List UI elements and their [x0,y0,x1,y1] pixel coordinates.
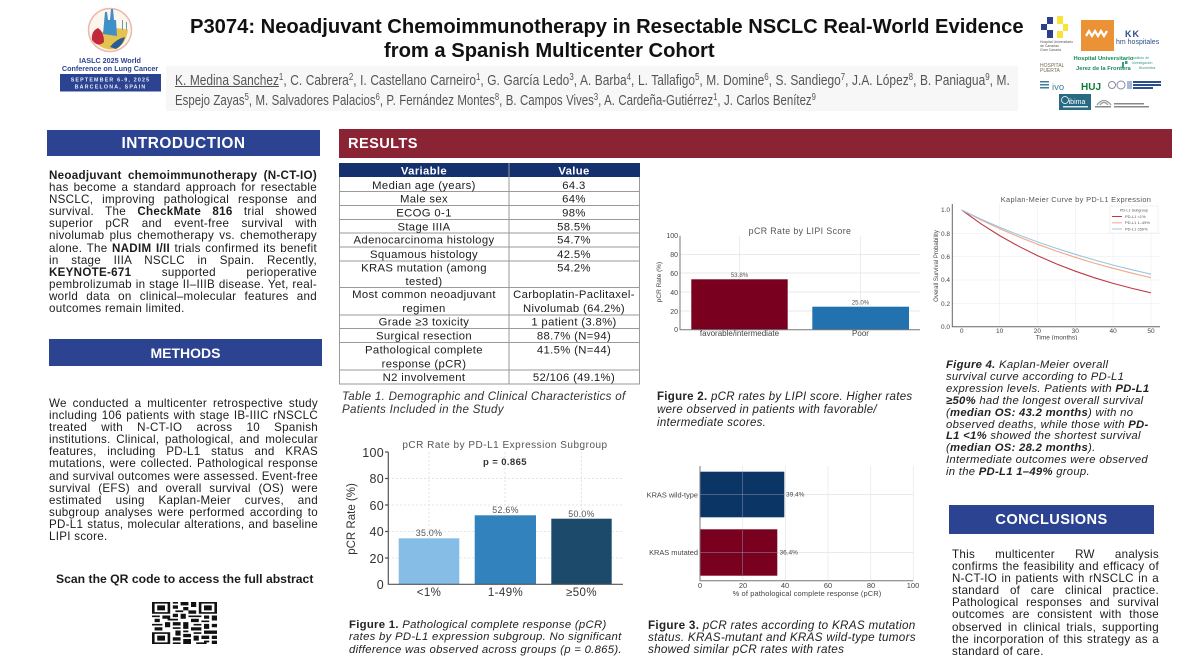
text block: conclusions: confirms the feasibility and efficacy of [952,560,1159,573]
logo: ibima [1059,94,1091,110]
chart: pCR by LIPI score: 40 [670,290,678,297]
panel: introduction heading [47,130,320,156]
chart: pCR by KRAS status: 80 [867,581,875,590]
legend: PD-L1 1–49% [1125,220,1150,225]
table: patient characteristics: Stage IIIA [397,222,451,234]
text block: introduction: has become a standard approach for resectable [49,181,317,194]
text block: conclusions: This multicenter RW analysis [952,548,1159,561]
logo: Hospital Universitario Jerez de la Frontera: Jerez de la Frontera [1076,66,1132,72]
chart: pCR by KRAS status: 40 [781,581,789,590]
caption: figure 4 [946,359,1149,478]
logo: Fundacion: Instituto de [1132,56,1149,60]
chart: Kaplan-Meier by PD-L1: 50 [1147,328,1155,335]
chart: pCR by KRAS status: 60 [824,581,832,590]
logo: IASLC 2025 World Conference on Lung Cancer [60,8,161,92]
chart: pCR by PD-L1 subgroup: 80 [369,472,384,486]
curve: PD-L1 50% or more [962,210,1151,274]
chart: pCR by PD-L1 subgroup: pCR Rate by PD-L1 Expression Subgroup [402,440,608,451]
chart: pCR by KRAS status: % of pathological complete response (pCR) [733,589,882,598]
table: patient characteristics: Most common neoadjuvant [352,289,496,301]
logo: Fundacion: Investigación [1132,61,1152,65]
text block: conclusions: Pathological responses and survival [952,596,1159,609]
text block: methods: We conducted a multicenter retrospective study [49,397,318,410]
chart: Kaplan-Meier by PD-L1: 0.2 [941,301,950,308]
chart: pCR by LIPI score: 0 [674,327,678,334]
table: patient characteristics: Carboplatin-Paclitaxel- [513,289,635,301]
text block: methods: LIPI score. [49,530,108,543]
caption: figure 3: showed similar pCR rates with rates [648,643,844,656]
table: patient characteristics: Pathological complete [365,344,483,356]
logo: Hospital Universitario Jerez de la Frontera [1074,56,1134,72]
text block: conclusions: outcomes are consistent with those [952,608,1159,621]
table: patient characteristics: 88.7% (N=94) [537,330,611,342]
chart: pCR by LIPI score: favorable/intermediate [700,329,780,338]
text block: introduction: world data on clinical–molecular features and [49,290,317,303]
logo: Canary cross: Gran Canaria [1040,48,1061,52]
legend: PD-L1 <1% [1125,214,1146,219]
chart: pCR by LIPI score: 80 [670,252,678,259]
chart: pCR by LIPI score: 20 [670,309,678,316]
text: QR prompt: Scan the QR code to access the full abstract [56,572,313,586]
chart: Kaplan-Meier by PD-L1: 30 [1072,328,1079,335]
panel: results heading: RESULTS [348,136,418,152]
logo: IVO: ivo [1052,82,1064,93]
logo: Junta de Andalucia [1095,100,1149,108]
table: patient characteristics: 64.3 [562,180,586,192]
chart: Kaplan-Meier by PD-L1: 0.4 [941,277,950,284]
caption: figure 2: Figure 2. pCR rates by LIPI score. Higher rates [657,391,912,403]
logo: Canary cross: de Canarias [1040,44,1059,48]
table: patient characteristics: regimen [402,303,446,315]
logo: Hospital Puerta de Hierro: HOSPITAL [1040,63,1065,69]
authors: K. Medina Sanchez1, C. Cabrera2, I. Castellano Carneiro1, G. García Ledo3, A. Barba4, L. Tallafigo5, M. Domine6, S. Sandiego7, J.A. López8, B. Paniagua9, M. [175,72,1010,89]
caption: figure 4: Figure 4. Kaplan-Meier overall [946,359,1108,371]
text block: conclusions: observed in clinical trials, supporting [952,621,1159,634]
text block: introduction: NSCLC, improving pathological response and [49,193,317,206]
authors: Espejo Zayas5, M. Salvadores Palacios6, P. Fernández Montes8, B. Campos Vives3, A. Cardeña-Gutiérrez1, J. Carlos Benítez9 [175,92,816,109]
panel: conclusions heading [949,505,1154,534]
title: from a Spanish Multicenter Cohort [384,40,715,62]
chart: pCR by LIPI score: 60 [670,271,678,278]
caption: figure 2 [657,391,912,429]
chart: pCR by PD-L1 subgroup: 1-49% [488,587,523,599]
text block: methods: PD-L1 status, molecular alterations, and baseline [49,518,318,531]
logo: Canary cross: Hospital Universitario [1040,40,1073,44]
text block: introduction: Neoadjuvant chemoimmunotherapy (N-CT-IO) [49,169,317,182]
panel: methods heading [49,339,322,366]
chart: Kaplan-Meier by PD-L1: 0.6 [941,254,950,261]
text block: methods: and survival outcomes were assessed. Event-free [49,470,318,483]
table: patient characteristics: Variable [401,166,447,178]
caption: figure 1: Figure 1. Pathological complete response (pCR) [349,619,607,631]
chart: pCR by PD-L1 subgroup: 52.6% [492,505,519,515]
text block: introduction: outcomes remain limited. [49,302,185,315]
caption: figure 3: Figure 3. pCR rates according to KRAS mutation [648,619,916,632]
chart: pCR by KRAS status: KRAS wild-type [647,490,698,500]
caption: figure 1: rates by PD-L1 expression subgroup. No significant [349,631,622,643]
caption: figure 4: ≥50% had the longest overall survival [946,395,1143,407]
caption: table 1: Patients Included in the Study [342,402,504,416]
text block: methods: features, including PD-L1 status and KRAS [49,445,318,458]
chart: Kaplan-Meier by PD-L1: 10 [996,328,1004,335]
logo: Fundacion: Biomédica [1139,66,1155,70]
chart: pCR by KRAS status: 20 [739,581,747,590]
chart: pCR by PD-L1 subgroup: ≥50% [566,587,597,599]
text block: methods: survival (EFS) and overall survival (OS) were [49,482,318,495]
table: patient characteristics: 52/106 (49.1%) [533,372,615,384]
logo: HUJ: HUJ [1081,82,1101,93]
bars [399,515,612,584]
table: patient characteristics: 54.2% [557,262,591,274]
chart: pCR by PD-L1 subgroup: <1% [417,587,441,599]
chart: Kaplan-Meier by PD-L1: 40 [1109,328,1117,335]
caption: table 1 [342,390,626,416]
chart: pCR by PD-L1 subgroup: 40 [369,525,384,539]
legend [1110,206,1158,233]
chart: Kaplan-Meier by PD-L1: 0 [960,328,964,335]
caption: figure 1: difference was observed across groups (p = 0.865). [349,644,622,656]
text block: introduction: KEYNOTE-671 supported perioperative [49,266,317,279]
logo: Fundacion [1122,56,1155,70]
logo: regional hospital [1108,81,1161,89]
chart: pCR by PD-L1 subgroup: p = 0.865 [483,457,527,468]
chart: pCR by PD-L1 subgroup: 20 [369,552,384,566]
chart: pCR by KRAS status: KRAS mutated [649,548,698,557]
chart: Kaplan-Meier by PD-L1 [934,195,1160,340]
legend: PD-L1 ≥50% [1125,226,1148,232]
table: patient characteristics: 64% [562,194,586,206]
logo date box [60,74,161,92]
text block: introduction: nivolumab plus chemotherapy vs. chemotherapy [49,229,317,242]
curve: PD-L1 1-49% [962,210,1151,278]
text block: introduction: alone. The NADIM I/II trials confirmed its benefit [49,242,317,255]
table: patient characteristics: Squamous histology [370,249,478,261]
panel: methods heading: METHODS [150,345,220,361]
text block: methods [49,397,318,543]
chart: pCR by LIPI score: 53.8% [731,272,749,279]
text block: methods: mutations, were collected. Pathological response [49,457,318,470]
chart: pCR by KRAS status: 0 [698,581,702,590]
text block: methods: treated with N-CT-IO across 10 Spanish [49,421,318,434]
logo: IASLC 2025 World Conference on Lung Cancer: Conference on Lung Cancer [62,64,158,73]
text block: conclusions: standard of care clinical practice. [952,584,1159,597]
table: patient characteristics: ECOG 0-1 [396,208,452,220]
text block: introduction: in stage IIIA NSCLC in Spain. Recently, [49,254,317,267]
text block: introduction: superior pCR and event-free survival with [49,217,317,230]
legend: PD-L1 Subgroup [1120,208,1148,212]
logo: Hospital Universitario Jerez de la Frontera: Hospital Universitario [1074,56,1134,62]
text block: introduction: pembrolizumab in stage II–IIIB disease. Yet, real- [49,278,317,291]
chart: Kaplan-Meier by PD-L1: 0.0 [941,324,950,331]
table: patient characteristics: 58.5% [557,222,591,234]
caption: figure 2: were observed in patients with favorable/ [657,404,877,416]
caption: figure 4: (median OS: 28.2 months). [946,442,1096,454]
table: patient characteristics: Grade ≥3 toxicity [379,316,469,328]
chart: pCR by KRAS status: 39.4% [786,492,805,498]
chart: pCR by LIPI score: pCR Rate by LIPI Score [749,226,851,236]
text block: conclusions: the incorporation of this strategy as a [952,633,1159,646]
chart: pCR by LIPI score: Poor [852,329,869,338]
table: patient characteristics [339,163,640,384]
caption: figure 4: observed deaths, while those with PD- [946,419,1149,431]
caption: figure 4: in the PD-L1 1–49% group. [946,466,1090,478]
caption: figure 4: survival curve according to PD-L1 [946,371,1124,383]
bars [691,279,909,330]
logo: Canary cross [1040,16,1073,52]
chart: pCR by PD-L1 subgroup: 0 [377,578,384,592]
panel: results heading [339,129,1172,158]
chart: pCR by PD-L1 subgroup: 35.0% [416,528,442,538]
table: patient characteristics: 98% [562,208,586,220]
chart: Kaplan-Meier by PD-L1: Overall Survival Probability [934,230,940,302]
icon: QR code [152,602,217,644]
table: patient characteristics: 1 patient (3.8%) [531,316,617,328]
text block: conclusions: standard of care. [952,645,1044,658]
logo: IVO [1040,81,1064,93]
logo: Hospital Puerta de Hierro: PUERTA [1040,68,1060,74]
chart: pCR by KRAS status [647,466,919,598]
logo: HM hospitales: hm hospitales [1116,39,1160,46]
bars [700,472,784,576]
chart: pCR by LIPI score: 100 [666,233,678,240]
table: patient characteristics: 42.5% [557,249,591,261]
chart: pCR by LIPI score: 25.0% [852,300,870,306]
text block: methods: subgroup analyses were performed according to [49,506,318,519]
text block: methods: institutions. Clinical, pathological, and molecular [49,433,318,446]
chart: pCR by PD-L1 subgroup: 100 [362,446,384,460]
table: patient characteristics: 41.5% (N=44) [537,344,611,356]
chart: pCR by KRAS status: 36.4% [780,550,798,556]
chart: pCR by PD-L1 subgroup [346,440,623,599]
table: patient characteristics: Surgical resection [376,330,472,342]
panel: introduction heading: INTRODUCTION [122,135,246,152]
table: patient characteristics: N2 involvement [383,372,466,384]
table: patient characteristics: response (pCR) [382,358,466,370]
logo: orange square [1081,20,1114,51]
chart: Kaplan-Meier by PD-L1: 20 [1034,328,1041,335]
title [190,16,1024,62]
chart: pCR by LIPI score [656,226,920,338]
text block: methods: estimated using Kaplan-Meier curves, and [49,494,318,507]
caption: figure 4: Intermediate outcomes were observed [946,454,1148,466]
logos: participating institutions [1040,16,1161,110]
table: patient characteristics: tested) [406,276,442,288]
logo text: IASLC 2025 World [79,56,141,65]
logo date box: BARCELONA, SPAIN [75,84,146,90]
table: patient characteristics: Adenocarcinoma histology [354,234,494,246]
text block: introduction [49,169,317,315]
chart: Kaplan-Meier by PD-L1: 0.8 [941,231,950,238]
logo: Hospital Puerta de Hierro [1040,63,1065,74]
caption: figure 4: (median OS: 43.2 months) with no [946,407,1133,419]
caption: figure 2: intermediate scores. [657,417,766,429]
chart: pCR by PD-L1 subgroup: pCR Rate (%) [346,483,358,555]
table: patient characteristics: Median age (years) [372,180,476,192]
text block: methods: including 106 patients with stage IB-IIIC rNSCLC [49,409,318,422]
table: patient characteristics: Male sex [400,194,448,206]
table: patient characteristics: Value [558,166,590,178]
text block: introduction: survival. The CheckMate 816 trial showed [49,205,317,218]
curve: PD-L1 under 1% [962,210,1151,293]
chart: pCR by PD-L1 subgroup: 50.0% [568,509,595,519]
caption: figure 3 [648,619,916,656]
chart: Kaplan-Meier by PD-L1: Kaplan-Meier Curve by PD-L1 Expression [1001,195,1151,204]
chart: pCR by KRAS status: 100 [907,581,919,590]
text block: conclusions: N-CT-IO in patients with rNSCLC in a [952,572,1159,585]
logo: HM hospitales: KK [1125,29,1140,39]
caption: figure 3: status. KRAS-mutant and KRAS wild-type tumors [648,631,916,644]
caption: figure 4: expression levels. Patients with PD-L1 [946,383,1149,395]
icon: Barcelona emblem [88,8,132,52]
table: patient characteristics: Nivolumab (64.2%) [523,303,625,315]
chart: pCR by PD-L1 subgroup: 60 [369,499,384,513]
logo date box: SEPTEMBER 6-9, 2025 [71,78,150,84]
chart: Kaplan-Meier by PD-L1: 1.0 [941,207,950,214]
logo: HM hospitales [1116,29,1160,46]
chart: pCR by LIPI score: pCR Rate (%) [656,262,663,302]
panel: conclusions heading: CONCLUSIONS [995,512,1108,528]
text block: conclusions [952,548,1159,658]
table: patient characteristics: KRAS mutation (among [361,262,487,274]
caption: figure 1 [349,619,622,656]
authors [166,66,1018,111]
caption: figure 4: L1 <1% showed the shortest survival [946,430,1141,442]
logo: ibima: ibima [1069,99,1085,106]
table: patient characteristics: 54.7% [557,234,591,246]
title: P3074: Neoadjuvant Chemoimmunotherapy in Resectable NSCLC Real-World Evidence [190,16,1024,38]
caption: table 1: Table 1. Demographic and Clinical Characteristics of [342,390,626,403]
